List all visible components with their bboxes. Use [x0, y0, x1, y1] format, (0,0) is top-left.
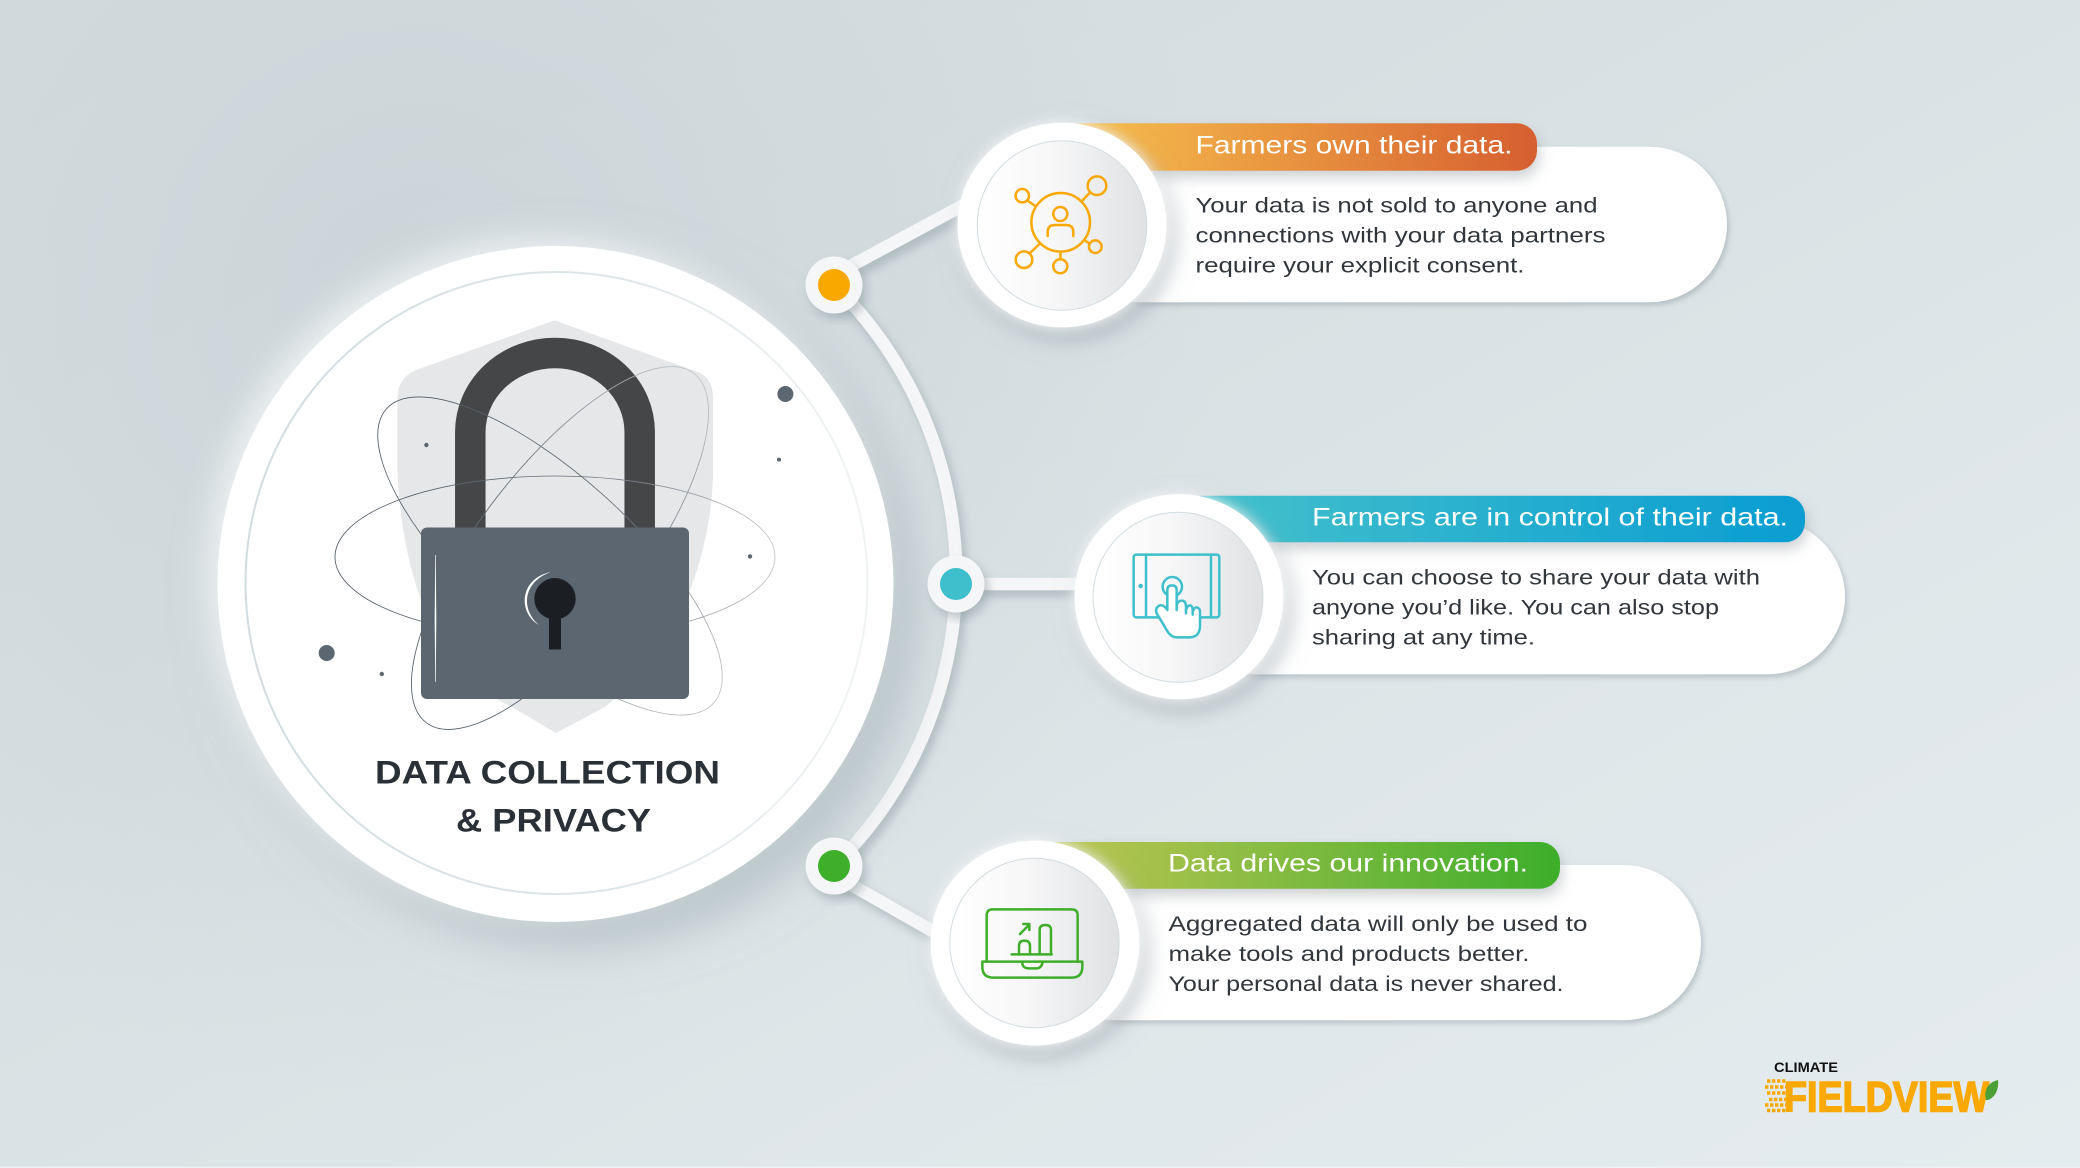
body text — [1196, 194, 1606, 278]
body text — [1312, 566, 1760, 650]
card body — [1035, 865, 1701, 1020]
body text: anyone you’d like. You can also stop — [1312, 596, 1719, 620]
heading: Farmers are in control of their data. — [1312, 504, 1788, 532]
decorative particles — [319, 386, 793, 676]
logo: Climate FieldView — [1765, 1059, 1998, 1121]
body text: Aggregated data will only be used to — [1168, 913, 1588, 936]
body text: You can choose to share your data with — [1312, 566, 1760, 589]
panel: farmers own their data — [958, 123, 1727, 327]
icon: shield — [397, 320, 713, 733]
node: green dot — [806, 838, 862, 894]
icon: connected person network — [1016, 176, 1106, 273]
badge circle — [1074, 494, 1284, 699]
icon: tablet touch — [1134, 555, 1219, 637]
body text: make tools and products better. — [1168, 943, 1530, 966]
logo speed stripes — [1765, 1081, 1787, 1110]
title: & PRIVACY — [456, 802, 651, 838]
badge inner disc — [1093, 512, 1263, 682]
card body — [1179, 519, 1845, 674]
logo: Climate FieldView: CLIMATE — [1774, 1059, 1838, 1075]
heading bar — [1035, 842, 1560, 889]
timeline connector arc and spokes — [834, 202, 1085, 941]
title — [375, 754, 720, 838]
body text: connections with your data partners — [1196, 224, 1606, 248]
title: DATA COLLECTION — [375, 754, 720, 790]
badge inner disc — [977, 141, 1147, 310]
badge circle — [958, 123, 1166, 327]
panel: farmers are in control — [1074, 494, 1845, 699]
logo leaf — [1985, 1080, 1998, 1100]
badge inner disc — [950, 858, 1119, 1028]
heading: Data drives our innovation. — [1168, 850, 1528, 878]
icon: padlock body — [421, 528, 689, 699]
icon: padlock shackle — [470, 353, 640, 530]
heading: Farmers own their data. — [1196, 131, 1512, 159]
logo: Climate FieldView: FIELDVIEW — [1784, 1073, 1989, 1121]
badge circle — [931, 840, 1139, 1046]
body text: sharing at any time. — [1312, 626, 1535, 650]
orbit rings — [332, 324, 775, 772]
icon: laptop with growth chart — [982, 909, 1082, 978]
heading bar — [1179, 496, 1805, 542]
heading bar — [1062, 123, 1537, 171]
body text: Your personal data is never shared. — [1168, 973, 1564, 996]
node: orange dot — [806, 256, 862, 314]
panel: central lock circle — [218, 246, 894, 922]
panel: data drives our innovation — [931, 840, 1701, 1046]
node: teal dot — [928, 556, 984, 612]
card body — [1062, 147, 1727, 302]
body text: Your data is not sold to anyone and — [1196, 194, 1598, 217]
body text: require your explicit consent. — [1196, 254, 1524, 278]
body text — [1168, 913, 1588, 996]
